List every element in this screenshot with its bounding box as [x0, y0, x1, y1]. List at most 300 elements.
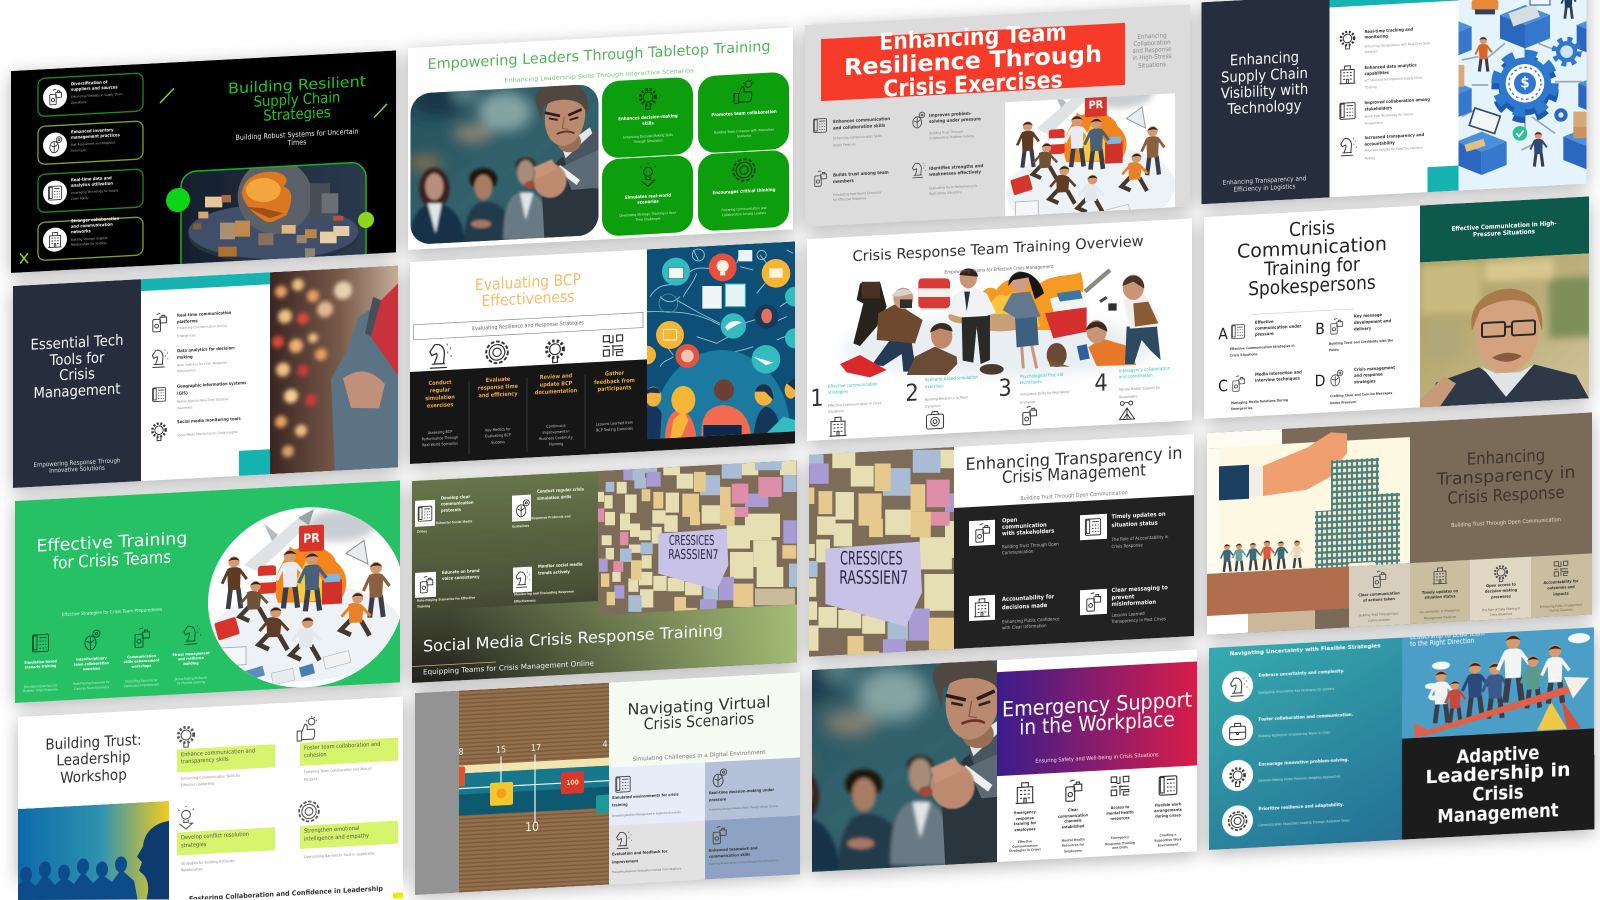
card: critical thinking: [698, 150, 789, 231]
column headings: [24, 650, 210, 675]
column headings: communication: [1058, 813, 1088, 819]
step titles: Psychological first aid: [1020, 372, 1064, 379]
item labels: simulation drills: [537, 494, 572, 501]
item labels: [1002, 509, 1168, 614]
item descriptions: Communication Essentials: Leading Through Turbulent Times: [1258, 818, 1350, 827]
image: timeline on wood: 17: [531, 743, 541, 754]
panel: Enhancing Transparency in Crisis Response: [1207, 412, 1592, 635]
colour blocks: [1207, 566, 1349, 635]
item labels: [71, 79, 120, 234]
item labels: communication under: [1255, 323, 1301, 331]
item labels: [833, 110, 983, 184]
column text: Realistic Crisis Response: [23, 687, 58, 693]
card: decision-making: Through Simulation: [632, 138, 663, 144]
image: timeline on wood: 4: [602, 739, 608, 750]
header caption: Effective Communication in High-: [1451, 220, 1557, 233]
item labels: communication: [441, 500, 474, 507]
grid descriptions: Fostering Relationships in Crisis Management Simulations: [709, 858, 779, 866]
column text: Supportive Work: [1154, 837, 1183, 843]
grid labels: communication skills: [709, 852, 751, 859]
heading: flexible strategies: Navigating Uncertainty with Flexible Strategies: [1229, 643, 1380, 658]
item labels: pressure: [1255, 331, 1274, 337]
illustration: team riding arrow: to the Right Direction: [1410, 637, 1474, 648]
grid descriptions: Simulating Resilient Management in Digital Environments: [612, 810, 681, 818]
column headings: exercises: [83, 666, 100, 671]
step descriptions: [828, 385, 1161, 415]
white base mask and numbers: [810, 369, 1108, 413]
card icons: [1373, 561, 1568, 588]
heading: Crisis Management: [1002, 460, 1146, 487]
column text: Response Training: [1105, 841, 1135, 846]
subtitle: Simulating Challenges in a Digital Environment: [632, 750, 765, 763]
column headings: channels: [1064, 818, 1082, 824]
item labels: [1258, 667, 1353, 812]
step titles: strategies: [828, 389, 848, 395]
column text: Business Continuity: [539, 435, 574, 441]
column headings: response: [1016, 816, 1034, 821]
item descriptions: [177, 323, 238, 437]
grid descriptions: Evaluating Response Strategies in Virtual Crisis Situations: [612, 866, 682, 874]
column headings: response time: [478, 384, 518, 392]
panel: Adaptive Leadership in Crisis Management: [1209, 623, 1594, 850]
column headings: feedback from: [594, 378, 635, 386]
side caption: Collaboration: [1133, 39, 1171, 48]
item labels: Identifies strengths and: [929, 163, 983, 171]
card titles: Timely updates on: [1422, 589, 1458, 595]
heading: Management: [34, 381, 121, 402]
column text: Communication: [1012, 843, 1038, 849]
column headings: building: [183, 661, 199, 666]
card text: Communication: [1368, 617, 1390, 623]
card text: The Role of Data Sharing in: [1481, 606, 1520, 612]
item labels: Key message: [1354, 312, 1382, 319]
illustration: PR crisis: [1005, 93, 1175, 216]
item labels: Social media monitoring tools: [177, 416, 241, 424]
card text: Management Practices: [1424, 615, 1456, 620]
heading: [31, 332, 123, 402]
highlight labels: Enhance communication and: [181, 748, 255, 758]
column headings: [425, 370, 635, 410]
heading: for Crisis Teams: [53, 547, 171, 573]
item descriptions: The Role of Accountability in: [1111, 534, 1169, 542]
column headings: simulation: [425, 394, 455, 402]
heading: Technology: [1227, 98, 1301, 118]
column text: Assessing BCP: [428, 430, 453, 435]
item descriptions: Public: [1329, 348, 1339, 352]
heading: Evaluating BCP: [475, 270, 581, 295]
grid labels: [612, 787, 774, 865]
descriptions: Overcoming Barriers to Trust in Leadership: [304, 851, 375, 859]
card titles: situation status: [1424, 594, 1456, 600]
heading: Resilience Through: [844, 41, 1102, 82]
heading: Building Trust:: [45, 732, 142, 754]
panel: Navigating Virtual Crisis Scenarios: [415, 672, 800, 895]
item labels: platforms: [177, 318, 198, 324]
photo: sticky notes wall: [729, 396, 1042, 724]
panel: Effective Training for Crisis Teams: [15, 477, 426, 729]
item descriptions: AI-Driven Insights for Proactive Decision: [1364, 145, 1423, 153]
panel: Social Media Crisis Response Training: [412, 423, 815, 683]
illustration in circle: [186, 477, 426, 720]
heading: Enhancing: [1467, 445, 1545, 469]
image: timeline on wood: 100: [566, 778, 579, 787]
heading: [1220, 52, 1308, 114]
subtitle: Building Trust Through Open Communication: [1020, 490, 1128, 502]
item badges: [1222, 670, 1253, 837]
panel: Building Trust Leadership Workshop: [18, 696, 403, 900]
image: timeline on wood: 15: [496, 745, 506, 756]
subtitle: Enhancing Transparency and: [1223, 175, 1306, 187]
card: real-world scenarios: Developing Strategic Thinking in Real-: [619, 211, 677, 218]
photo: leader pointing: [410, 84, 598, 244]
column text: BCP Testing Exercises: [596, 426, 633, 433]
descriptions: Effective Leadership: [181, 781, 215, 787]
column headings: participants: [598, 385, 631, 393]
grid labels: training: [612, 803, 628, 808]
heading: Social Media Crisis Response Training: [423, 621, 723, 656]
column text: Continuous Improvement: [124, 682, 160, 688]
highlight labels: transparency skills: [181, 757, 229, 765]
item labels: Increased transparency and: [1364, 132, 1424, 140]
column text: Real-World Scenarios: [422, 441, 458, 447]
column headings: established: [1062, 824, 1085, 829]
dark panel: [954, 495, 1194, 649]
item descriptions: Monitoring and Evaluating Response: [514, 589, 574, 597]
item descriptions: High-Stress Situations: [929, 190, 962, 196]
item labels: strategies: [1354, 378, 1376, 385]
item labels: members: [833, 178, 854, 184]
item descriptions: Relationships for Stability: [71, 241, 107, 247]
item labels: protocols: [441, 507, 462, 513]
item labels: accountability: [1364, 140, 1395, 147]
item descriptions: Enhancing Public Confidence: [1002, 616, 1060, 624]
column headings: employees: [1014, 827, 1036, 832]
column headings: Communication: [127, 654, 156, 660]
grid descriptions: [612, 804, 779, 874]
item labels: interview techniques: [1255, 375, 1300, 383]
subtitle: Empowering Response Through: [34, 458, 121, 469]
item labels: with stakeholders: [1002, 528, 1055, 538]
column text: Key Metrics for: [485, 427, 511, 433]
item labels: Educate on brand: [442, 568, 480, 575]
item labels: prevent: [1112, 594, 1135, 602]
highlight labels: [181, 741, 381, 849]
heading: in the Workplace: [1019, 707, 1175, 740]
card titles: of actions taken: [1363, 597, 1395, 603]
item descriptions: Enhancing Flexibility in Supply Chain: [71, 92, 123, 99]
item labels: Diversification of: [71, 79, 108, 86]
panel: Building Resilient Supply Chain Strategies: [11, 50, 396, 291]
column headings: Access to: [1111, 805, 1130, 810]
letters: B: [1315, 319, 1325, 339]
header caption: [1451, 220, 1557, 240]
card titles: decision-making: [1485, 588, 1517, 594]
panel: Empowering Leaders Through Tabletop Training: [408, 28, 793, 250]
card: decision-making: Enhances decision-making: [618, 113, 678, 121]
step descriptions: Responders: [1119, 394, 1138, 399]
letters: D: [1315, 371, 1325, 391]
column text: Employees: [1064, 848, 1082, 854]
card titles: Clear communication: [1358, 591, 1400, 598]
image: timeline on wood: [453, 683, 610, 893]
item descriptions: Blockchain Technology for Secure: [1364, 112, 1413, 119]
step descriptions: Dynamics: [925, 404, 941, 409]
item descriptions: Optimization: [177, 368, 196, 373]
column headings: Emergency: [1014, 810, 1036, 815]
card: decision-making: Enhancing Decision-Making Skills: [623, 133, 673, 140]
image: timeline on wood: 8: [458, 747, 464, 758]
item labels: Clear messaging to: [1112, 585, 1168, 594]
heading: [230, 76, 366, 122]
step descriptions: Simulation Drills for Real-World: [1020, 390, 1069, 397]
subtitle box: Evaluating Resilience and Response Strategies: [472, 320, 584, 332]
item labels: weaknesses effectively: [929, 169, 981, 177]
subtitle: Innovative Solutions: [49, 465, 105, 475]
item descriptions: Making: [1364, 156, 1375, 161]
side caption: in High-Stress: [1133, 53, 1171, 62]
heading: [1237, 214, 1387, 301]
highlight labels: Develop conflict resolution: [181, 831, 249, 841]
item labels: Builds trust among team: [833, 169, 889, 178]
subtitle: Times: [287, 138, 307, 147]
column text: Performance Through: [422, 435, 458, 441]
item descriptions: with Clear Information: [1002, 623, 1047, 630]
column headings: [1014, 802, 1183, 832]
column text: Emergency: [1111, 835, 1129, 840]
item descriptions: Data Analytics for Crisis Response: [177, 360, 227, 367]
heading: Training for: [1263, 254, 1360, 281]
item descriptions: Crisis Response: [1112, 542, 1143, 549]
item labels: Open: [1002, 517, 1017, 525]
item labels: Improved collaboration among: [1364, 96, 1430, 105]
card text: During Disasters: [1549, 607, 1573, 613]
item labels: Foster collaboration and communication.: [1258, 712, 1353, 723]
card titles: processes: [1491, 594, 1512, 600]
subtitle: [1223, 175, 1306, 192]
item labels: Accountability for: [1002, 594, 1054, 603]
column headings: workshops: [131, 664, 152, 669]
item descriptions: Chain Agility: [71, 196, 89, 201]
item descriptions: Simulating Real-World Scenarios: [833, 190, 882, 197]
heading: Spokespersons: [1248, 272, 1376, 301]
item labels: [1364, 25, 1430, 147]
icons: [430, 335, 623, 369]
column text: Lessons Learned from: [596, 420, 634, 427]
card titles: outcomes and: [1547, 585, 1575, 591]
card: critical thinking: Encourages critical thinking: [713, 187, 775, 195]
card titles: Open access to: [1486, 582, 1516, 588]
item descriptions: [1230, 338, 1393, 411]
step descriptions: Situations: [828, 409, 844, 414]
column text: Mental Health: [1061, 837, 1085, 843]
item descriptions: Crafting Clear and Concise Messages: [1330, 391, 1392, 398]
item labels: [441, 486, 584, 581]
item labels: and communication: [71, 221, 113, 229]
item labels: trends actively: [538, 569, 570, 576]
column text: Complex Team Dynamics: [74, 685, 110, 691]
card titles: [1358, 579, 1579, 607]
item cards: [38, 73, 143, 261]
heading: Crisis Exercises: [883, 67, 1063, 103]
highlight labels: Foster team collaboration and: [304, 741, 381, 752]
illustration: supply chain gears: [1458, 0, 1586, 190]
card text: Building Trust Through Open: [1359, 611, 1399, 618]
column headings: regular: [430, 387, 451, 395]
side caption: [1132, 32, 1172, 70]
heading: [37, 528, 188, 574]
step descriptions: Mental Health Support for: [1119, 385, 1161, 392]
heading: Leadership in: [1426, 760, 1571, 789]
illustration: hand and buildings: [1207, 428, 1410, 574]
step titles: exercises: [925, 383, 944, 389]
item labels: communication: [1002, 522, 1047, 531]
column headings: Stress management: [172, 651, 210, 657]
item labels: delivery: [1354, 325, 1372, 332]
column headings: Evaluate: [486, 376, 511, 384]
item descriptions: Under Pressure: [833, 142, 856, 148]
item labels: Develop clear: [441, 494, 470, 501]
letters: [1218, 319, 1325, 396]
icons: [1339, 31, 1357, 156]
image: globe with fire: [180, 162, 367, 264]
heading: Empowering Leaders Through Tabletop Training: [427, 38, 770, 73]
column text: Role-Playing Scenarios for: [73, 680, 110, 686]
heading: [628, 692, 770, 735]
item labels: Embrace uncertainty and complexity.: [1258, 668, 1345, 679]
column headings: Simulation-based: [24, 659, 57, 665]
item labels: Effective: [1255, 319, 1274, 325]
step titles: and coordination: [1119, 372, 1153, 379]
item descriptions: Tracking: [1364, 85, 1377, 90]
heading: [1426, 741, 1570, 829]
item labels: capabilities: [1364, 70, 1390, 76]
icons: [178, 716, 319, 829]
panel: Essential Tech Tools for Crisis Management: [13, 265, 398, 488]
image: leader silhouette: [18, 801, 169, 900]
item labels: Real-time data and: [71, 175, 112, 182]
illustration: supply chain gears: $: [1520, 75, 1530, 92]
item labels: voice consistency: [442, 574, 480, 581]
heading: Adaptive: [1457, 743, 1540, 768]
gradient banner: [997, 661, 1197, 776]
item labels: Real-time communication: [177, 310, 232, 318]
heading: Essential Tech: [31, 332, 123, 354]
item descriptions: Crisis Situations: [1230, 352, 1258, 358]
item descriptions: [1364, 41, 1430, 161]
panel: Enhancing Supply Chain Visibility with Technology: [1202, 0, 1600, 204]
grid labels: Real-time decision-making under: [709, 788, 774, 795]
item labels: and collaboration skills: [833, 123, 886, 131]
item labels: situation status: [1112, 520, 1158, 529]
card text: Accountability in Emergency: [1420, 608, 1460, 614]
icons: [1232, 318, 1343, 392]
item labels: making: [177, 354, 193, 360]
highlight labels: intelligence and empathy: [304, 833, 370, 843]
item descriptions: Emergencies: [177, 333, 196, 338]
item icons: [43, 84, 67, 252]
card: decision-making: skills: [642, 120, 654, 126]
illustration: crisis team: [840, 268, 1161, 377]
item descriptions: Transactions: [1364, 120, 1383, 126]
cards: [1349, 553, 1592, 627]
heading: Enhancing: [1230, 49, 1299, 70]
item labels: monitoring: [1364, 33, 1388, 40]
item labels: misinformation: [1112, 599, 1156, 608]
column headings: resources: [1110, 816, 1130, 821]
side caption: Enhancing: [1137, 32, 1167, 41]
item descriptions: Transparency in Past Crises: [1111, 616, 1166, 624]
heading: Emergency Support: [1002, 688, 1192, 722]
grid labels: Simulated environments for crisis: [612, 792, 679, 800]
item descriptions: Evaluating Team Performance in: [929, 184, 977, 190]
heading: Crisis: [1472, 782, 1524, 806]
column headings: documentation: [535, 388, 577, 396]
item labels: networks: [71, 228, 91, 234]
item labels: Real-time tracking and: [1364, 26, 1413, 34]
heading: Tools for: [49, 350, 105, 370]
card text: Enhancing Public Engagement: [1540, 602, 1583, 609]
item descriptions: Risk Assessment and Mitigation: [71, 140, 115, 147]
item descriptions: Collaborative Problem-Solving: [929, 134, 974, 140]
item descriptions: Mobile Apps for Real-Time Situation: [177, 397, 228, 404]
column text: Strategies in Crises: [1009, 847, 1041, 853]
item descriptions: Building Trust and Credibility with the: [1329, 338, 1393, 346]
step titles: Interagency collaboration: [1119, 365, 1170, 373]
descriptions: Relationships: [181, 867, 203, 872]
card text: [1359, 601, 1583, 624]
heading: Enhancing Team: [879, 20, 1067, 56]
heading: Workshop: [60, 767, 127, 787]
item descriptions: Enhancing Communication During: [177, 323, 227, 330]
heading: Strategies: [263, 104, 331, 125]
illustration: team riding arrow: [1402, 623, 1594, 740]
accent dots: [166, 188, 374, 228]
column text: Creating a: [1160, 832, 1176, 838]
card titles: Accountability for: [1543, 579, 1579, 585]
panel: Crisis Communication Training for Spokespersons: [1204, 196, 1594, 419]
card: critical thinking: Collaboration Among Leaders: [722, 211, 766, 217]
card: real-world scenarios: Time Challenges: [635, 216, 661, 222]
column text: and Drills: [1112, 845, 1128, 850]
icons: [1016, 774, 1177, 804]
letters: C: [1218, 376, 1228, 396]
card: team collaboration: [698, 72, 789, 153]
card: team collaboration: Promotes team collaboration: [711, 109, 777, 117]
panel: Emergency Support in the Workplace: [671, 557, 1197, 900]
column text: Effective: [1018, 839, 1032, 844]
highlight labels: cohesion: [304, 752, 327, 759]
heading: Crisis Response: [1447, 482, 1565, 508]
item labels: (GIS): [177, 390, 188, 396]
heading: Management: [1437, 800, 1559, 828]
heading: Building Resilient: [228, 74, 367, 98]
highlight boxes: [177, 738, 398, 855]
column headings: and efficiency: [479, 391, 518, 399]
column headings: during crises: [1155, 813, 1182, 819]
subtitle: Building Trust Through Open Communication: [1451, 517, 1561, 529]
letters: A: [1218, 324, 1229, 344]
heading: Communication: [1237, 233, 1387, 263]
card: real-world scenarios: Simulates real-world: [625, 192, 671, 200]
item labels: and response: [1354, 371, 1383, 378]
item labels: Stronger collaboration: [71, 216, 119, 223]
white base mask and numbers: 4: [1094, 369, 1108, 397]
item labels: Prioritize resilience and adaptability.: [1258, 802, 1344, 812]
item descriptions: Building Trust Through Open: [1002, 541, 1059, 549]
photo: spokesperson: [1420, 253, 1594, 407]
item descriptions: Role-Playing Scenarios for Effective: [417, 596, 475, 603]
photo: leader pointing: [671, 559, 1159, 900]
